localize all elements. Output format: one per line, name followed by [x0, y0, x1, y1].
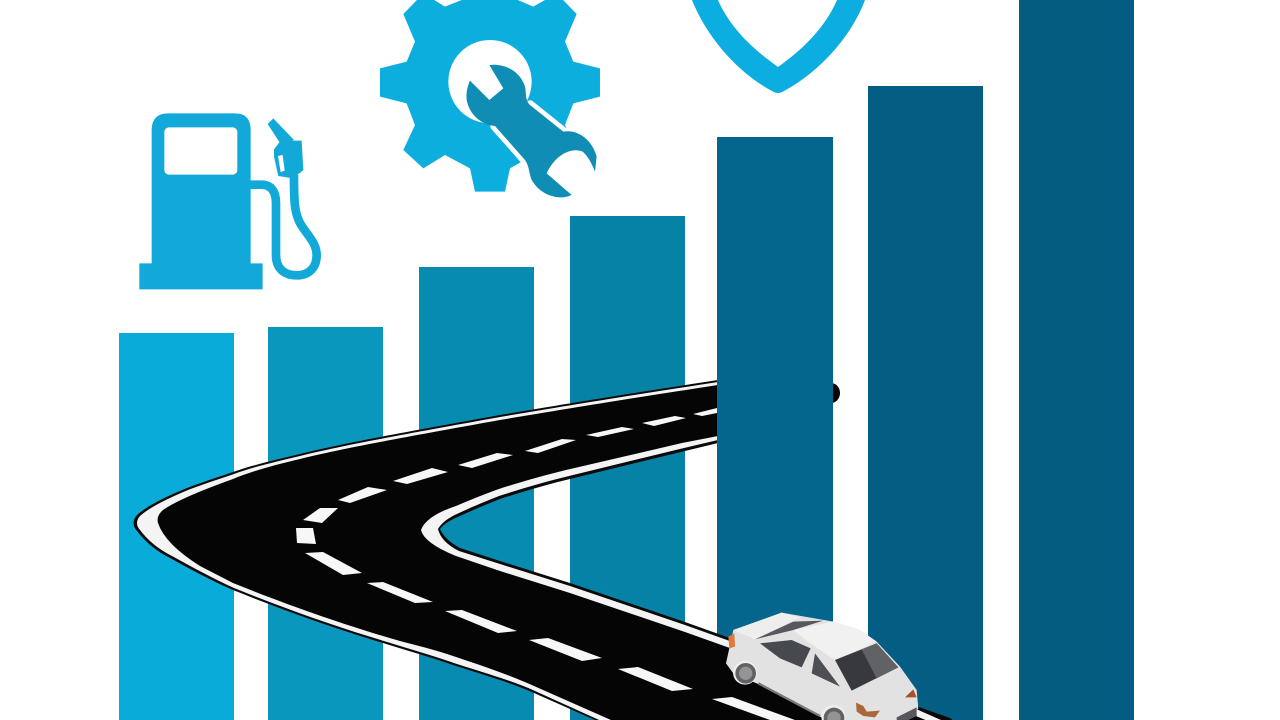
road white edge	[137, 382, 950, 720]
car	[726, 613, 918, 720]
bar 1	[119, 333, 234, 720]
road outline	[134, 380, 958, 720]
grille	[897, 707, 917, 720]
pump window	[164, 127, 237, 175]
road	[134, 380, 958, 720]
front wheel	[821, 705, 845, 720]
bar 4	[570, 216, 685, 720]
pump spout	[268, 118, 294, 144]
bar 5 lower	[717, 590, 833, 720]
bar chart: rising bars	[119, 0, 1134, 720]
side window rear	[760, 640, 811, 667]
bar 2	[268, 327, 383, 720]
gear	[380, 0, 600, 192]
icon: shield	[692, 0, 865, 93]
pump hose	[250, 175, 317, 275]
gear hole	[448, 40, 532, 123]
side window front	[812, 653, 840, 687]
bar 5 upper, in front of road	[717, 137, 833, 607]
tail light	[728, 633, 735, 648]
wrench	[466, 65, 597, 197]
car sill	[758, 683, 820, 716]
sunroof	[755, 621, 823, 639]
icon: gear with wrench	[380, 0, 600, 197]
windshield	[835, 643, 898, 691]
car body	[726, 613, 918, 720]
headlight left	[856, 703, 880, 717]
bar 3	[419, 267, 534, 720]
bar 7	[1019, 0, 1134, 720]
bar 6	[868, 86, 983, 720]
car boot	[733, 613, 800, 639]
headlight right	[905, 689, 917, 697]
car roof	[793, 622, 877, 660]
pump nozzle	[274, 141, 303, 178]
icon: fuel pump	[139, 113, 317, 289]
nozzle slot	[278, 155, 285, 172]
rear wheel	[733, 661, 757, 685]
pump body	[139, 113, 263, 289]
road end peeking behind bar	[822, 383, 840, 403]
road asphalt	[158, 385, 935, 720]
wrench halo	[495, 105, 593, 193]
road centre dashes	[296, 408, 795, 720]
